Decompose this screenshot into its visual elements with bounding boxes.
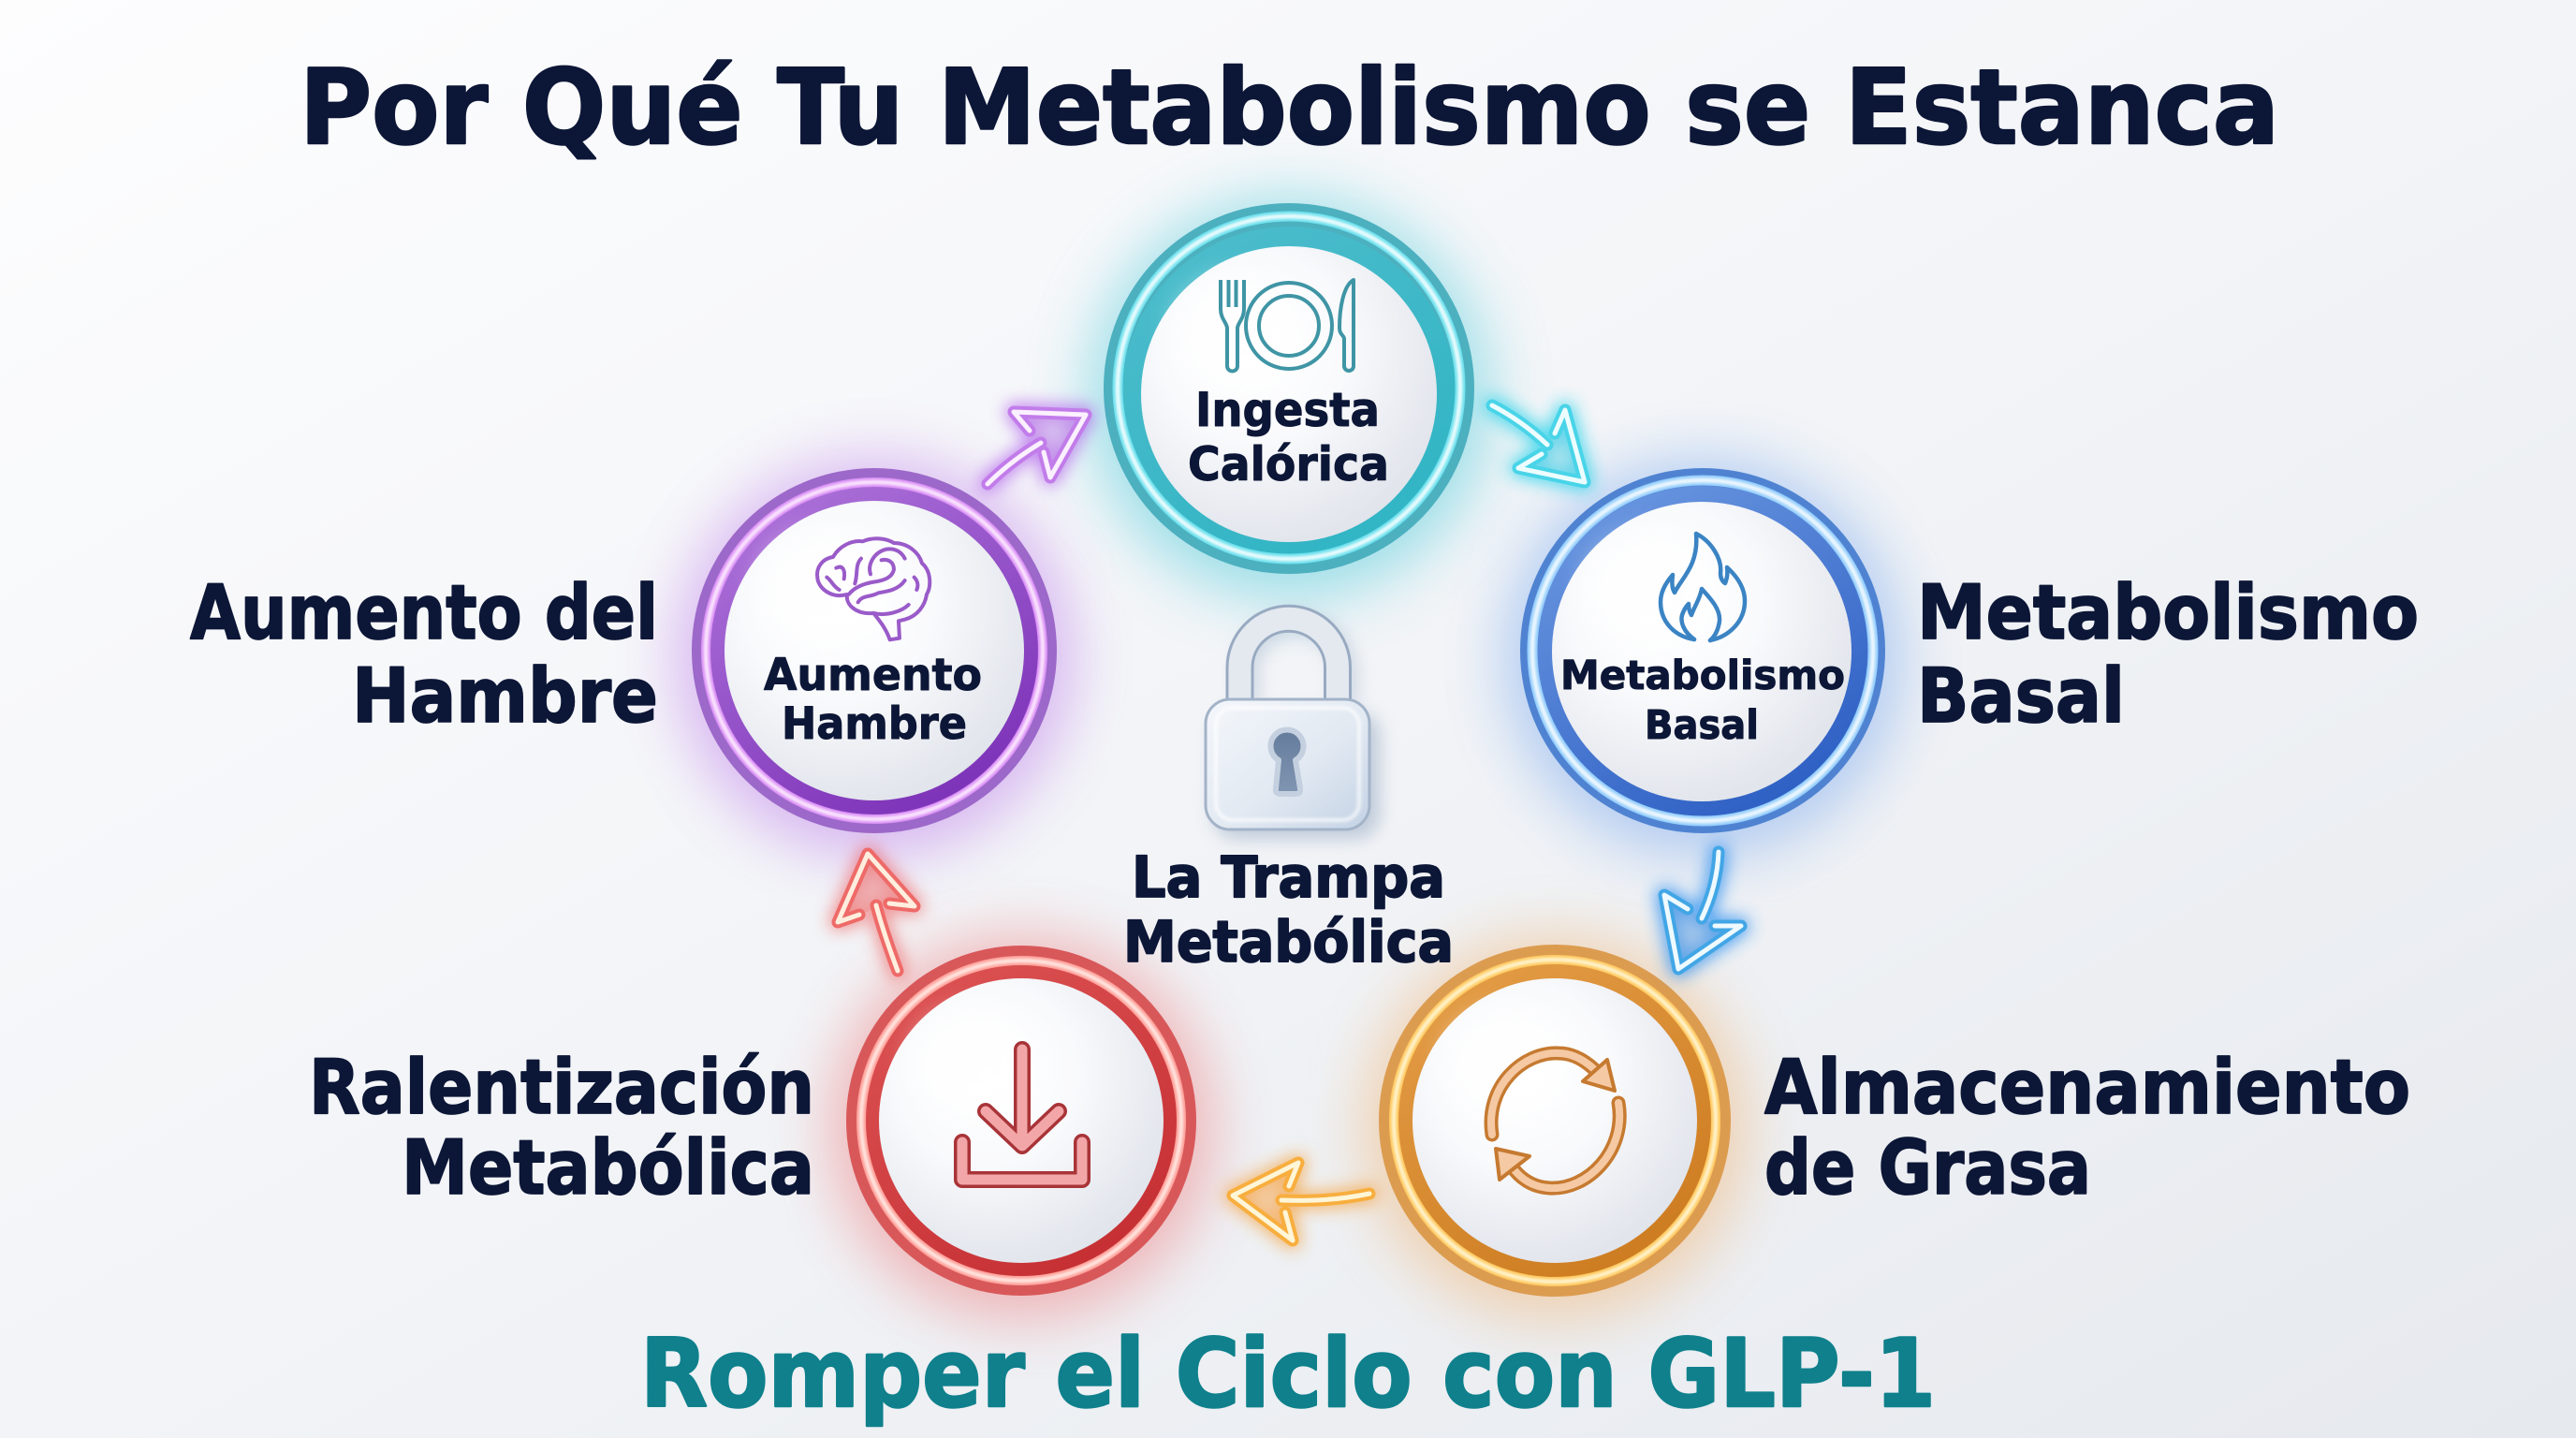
side label: Metabolismo Basal: Basal: [1917, 653, 2125, 740]
side label: Aumento del Hambre: Aumento del: [190, 569, 658, 656]
center label: La Trampa Metabólica: La Trampa: [1132, 844, 1445, 911]
icon: flame: [1661, 534, 1745, 640]
center label: La Trampa Metabólica: Metabólica: [1123, 909, 1454, 976]
step: Aumento Hambre: [676, 459, 1073, 856]
step: Ingesta Calórica: Ingesta: [1195, 383, 1380, 437]
side label: Ralentización Metabólica: Metabólica: [402, 1124, 814, 1211]
step: Ralentización Metabólica: [829, 935, 1213, 1319]
arrow: red, ralentizacion to hambre: [838, 854, 915, 971]
side label: Aumento del Hambre: [190, 569, 658, 740]
title: Por Qué Tu Metabolismo se Estanca: [300, 48, 2279, 169]
side label: Ralentización Metabólica: Ralentización: [309, 1044, 814, 1131]
icon: circular arrows: [1491, 1053, 1619, 1188]
side label: Metabolismo Basal: [1917, 569, 2419, 740]
icon: padlock: [1206, 619, 1380, 839]
step: Metabolismo Basal: Basal: [1645, 702, 1759, 749]
icon: download into tray: [962, 1049, 1082, 1180]
center label: La Trampa Metabólica: [1123, 844, 1454, 976]
icon: brain: [817, 538, 929, 639]
footer call to action: Romper el Ciclo con GLP-1: [640, 1318, 1936, 1429]
icon: fork, plate and knife: [1221, 280, 1354, 371]
side label: Almacenamiento de Grasa: de Grasa: [1764, 1124, 2091, 1211]
step: Metabolismo Basal: [1504, 459, 1901, 856]
step: Ingesta Calórica: Calórica: [1188, 437, 1389, 492]
step: Metabolismo Basal: Metabolismo: [1560, 653, 1845, 699]
side label: Almacenamiento de Grasa: Almacenamiento: [1764, 1044, 2410, 1131]
arrow: orange, grasa to ralentizacion: [1233, 1163, 1369, 1240]
side label: Aumento del Hambre: Hambre: [352, 653, 658, 740]
step: Aumento Hambre: Aumento: [764, 650, 982, 701]
arrow: purple, hambre to ingesta: [988, 412, 1086, 484]
step: Ingesta Calórica: [1088, 197, 1490, 599]
arrow: teal, ingesta to metabolismo: [1492, 405, 1585, 482]
side label: Metabolismo Basal: Metabolismo: [1917, 569, 2419, 656]
side label: Almacenamiento de Grasa: [1764, 1044, 2410, 1211]
arrow: blue, metabolismo to grasa: [1664, 852, 1741, 969]
side label: Ralentización Metabólica: [309, 1044, 814, 1211]
step: Aumento Hambre: Hambre: [782, 698, 967, 750]
step: Almacenamiento de Grasa: [1363, 935, 1747, 1319]
